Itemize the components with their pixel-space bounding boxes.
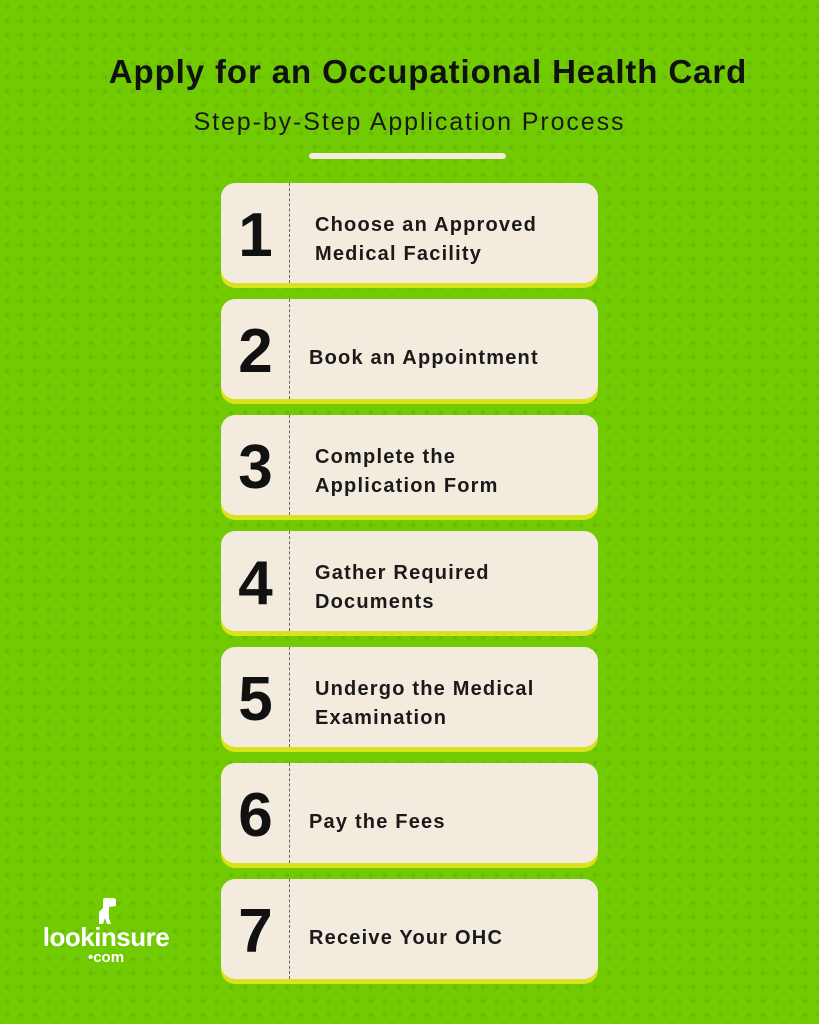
logo [43, 898, 169, 966]
title: Apply for an Occupational Health Card [109, 53, 747, 90]
card: step 3: Complete the [315, 446, 456, 468]
card: step 3: 3 [238, 433, 273, 502]
card: step 4: Documents [315, 591, 435, 613]
card: step 6: 6 [238, 781, 273, 850]
card: step 7: Receive Your OHC [309, 926, 503, 948]
card: step 2: Book an Appointment [309, 346, 539, 368]
card: step 2 [221, 299, 598, 399]
underline bar [309, 153, 506, 159]
card: step 7: 7 [238, 897, 273, 966]
card: step 4: 4 [238, 549, 273, 618]
card: step 1 [221, 183, 598, 283]
logo: •com [88, 949, 124, 966]
card: step 4 [221, 531, 598, 631]
logo: lookinsure [43, 922, 169, 952]
card: step 4: Gather Required [315, 562, 490, 584]
card: step 3: Application Form [315, 475, 499, 497]
card: step 3 [221, 415, 598, 515]
card: step 6 [221, 763, 598, 863]
card: step 1: 1 [238, 201, 273, 270]
card: step 5 [221, 647, 598, 747]
card: step 7 [221, 879, 598, 979]
card: step 5: 5 [238, 665, 273, 734]
card: step 1: Choose an Approved [315, 214, 537, 236]
card: step 5: Examination [315, 707, 447, 729]
card: step 6: Pay the Fees [309, 810, 446, 832]
card: step 5: Undergo the Medical [315, 678, 534, 700]
subtitle: Step-by-Step Application Process [194, 108, 625, 136]
icon: dino [99, 898, 116, 924]
card: step 2: 2 [238, 317, 273, 386]
card: step 1: Medical Facility [315, 243, 482, 265]
